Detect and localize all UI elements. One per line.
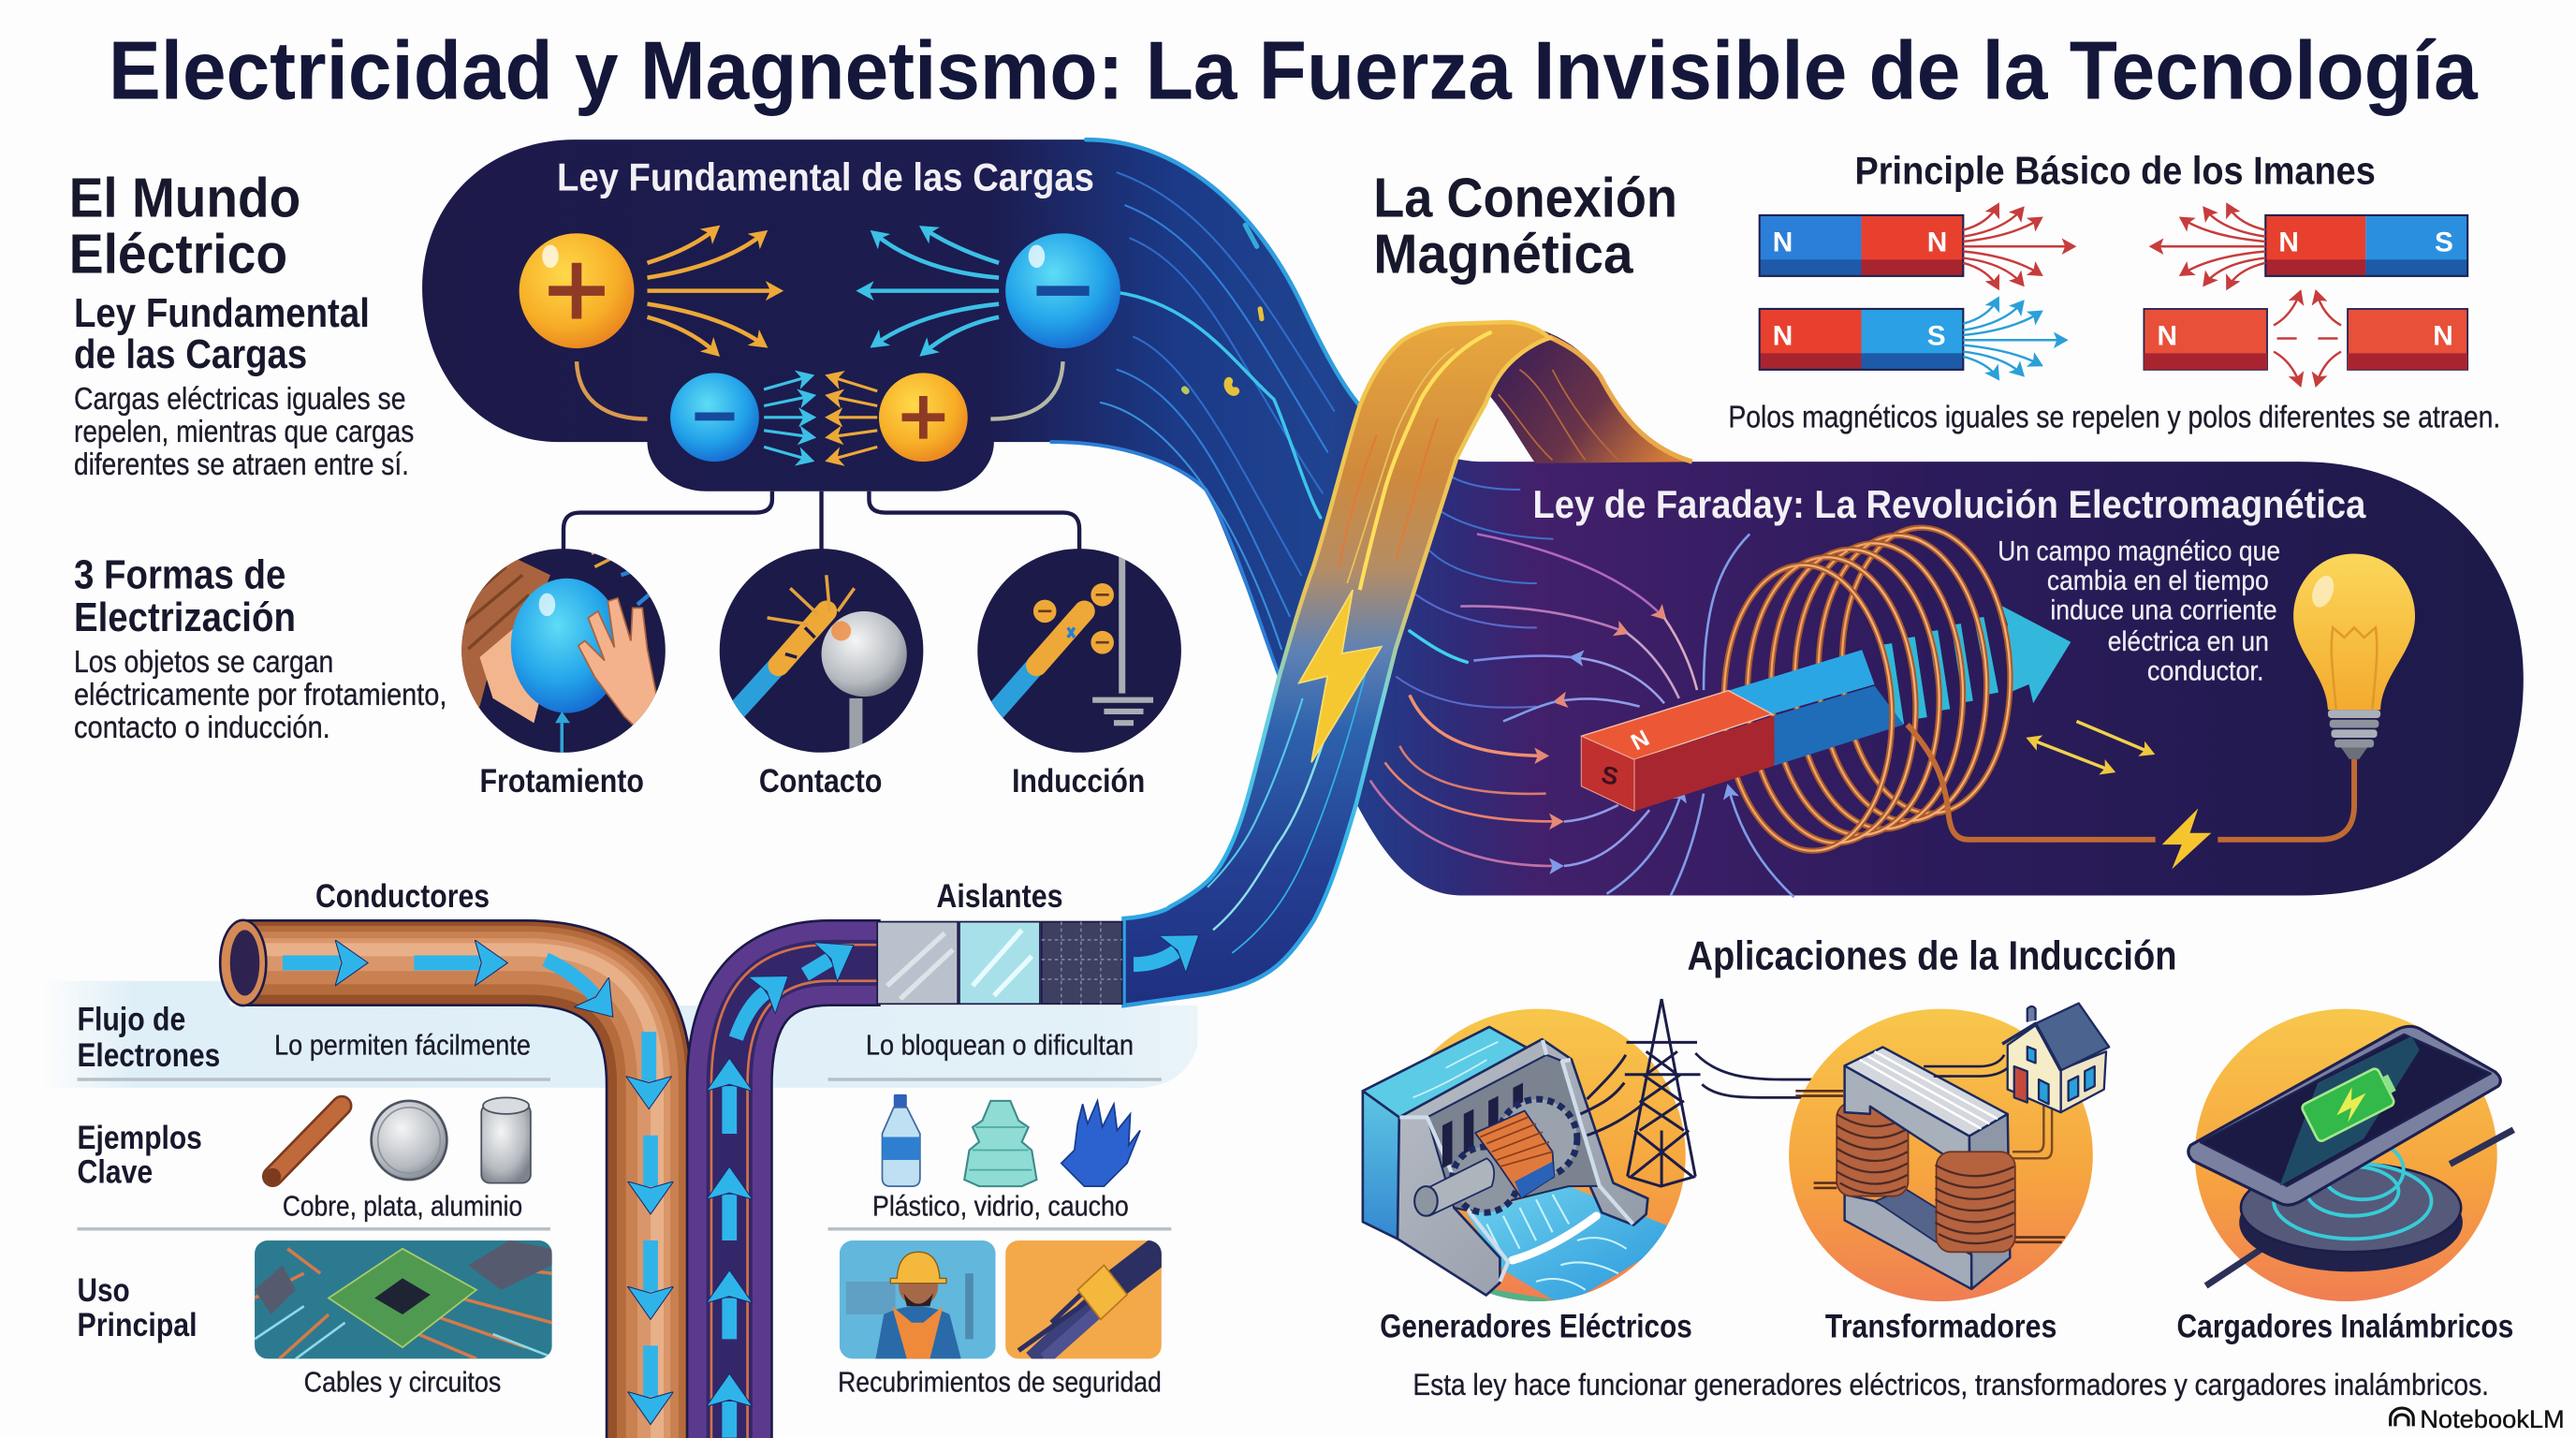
icon: electric generator (1363, 1009, 1686, 1306)
lamination side (1969, 1114, 2010, 1289)
magnet N S with blue field: N (1773, 321, 1793, 352)
charger pad (2206, 1130, 2513, 1285)
repulsion arrows negative (861, 228, 999, 353)
magnet pair repel S N: S (2435, 227, 2453, 258)
magnet N S with blue field: S (1927, 321, 1946, 352)
copper coil front half (1799, 523, 2019, 851)
magnet pair repel N N: N (1927, 227, 1947, 258)
bar magnet: N (1627, 726, 1654, 756)
application labels: Generadores Eléctricos (1380, 1309, 1692, 1345)
gold to blue ribbon (1123, 322, 1550, 1005)
copper coil back half (1715, 528, 1935, 855)
water tank (1363, 1027, 1528, 1117)
row: electron flow: Lo bloquean o dificultan (866, 1029, 1134, 1062)
magnet pair with facing N poles: N (2433, 321, 2453, 352)
row: electron flow (77, 1001, 1134, 1074)
icon: glass insulator (964, 1101, 1036, 1186)
comparison table headers (315, 878, 1063, 915)
heading: Principle Básico de los Imanes (1855, 149, 2376, 193)
applications heading: Aplicaciones de la Inducción (1687, 932, 2177, 978)
icon: large negative charge (1005, 233, 1120, 348)
icon: plastic bottle (882, 1094, 920, 1186)
attraction arrows (764, 376, 877, 460)
body text: diferentes se atraen entre sí. (74, 448, 409, 482)
bar magnet: S (1599, 760, 1621, 791)
right winding (1936, 1152, 2015, 1252)
bar magnet (1581, 606, 2071, 811)
ribbon back fold (1488, 322, 1692, 463)
row: key examples: Ejemplos (77, 1120, 202, 1156)
description text: cambia en el tiempo (2047, 565, 2269, 596)
magnet basics (1728, 149, 2500, 434)
text block: electric world (69, 167, 446, 745)
description text: induce una corriente (2050, 595, 2277, 626)
sub heading: de las Cargas (74, 331, 307, 377)
magnet pair repel N N (1760, 205, 2073, 287)
body text: contacto o inducción. (74, 711, 330, 745)
icon: transmission tower (1580, 999, 1843, 1186)
table row dividers (77, 1079, 1171, 1229)
icon: house (2002, 1004, 2109, 1112)
lower core (1845, 1195, 1971, 1289)
magnet pair repel S N: N (2278, 227, 2299, 258)
electrification labels: Inducción (1012, 763, 1145, 800)
electrification labels (479, 763, 1145, 800)
insulator electron arrows (729, 951, 1177, 1438)
icon: large positive charge (520, 233, 634, 348)
row: key examples: Plástico, vidrio, caucho (872, 1190, 1129, 1223)
sub heading: 3 Formas de (74, 551, 285, 597)
row: main use (77, 1240, 1162, 1399)
connector lines to electrification circles (564, 492, 1079, 552)
soft band behind electron flow row (41, 981, 1197, 1088)
ribbon light streaks (1051, 139, 1553, 708)
description text: conductor. (2147, 656, 2264, 687)
application labels: Cargadores Inalámbricos (2177, 1309, 2513, 1345)
icon: NotebookLM logo (2391, 1408, 2413, 1426)
comparison table headers: Aislantes (936, 878, 1063, 915)
row: electron flow: Flujo de (77, 1001, 185, 1037)
left winding (1837, 1103, 1909, 1196)
magnet pair repel S N (2152, 205, 2467, 287)
icon: small positive charge (879, 373, 968, 462)
electrification labels: Frotamiento (479, 763, 644, 800)
connectors between charge pairs (577, 361, 1063, 419)
sub heading: Electrización (74, 594, 296, 640)
right section heading: La Conexión (1373, 167, 1677, 229)
description text: Un campo magnético que (1998, 536, 2280, 566)
image: safety worker (840, 1240, 996, 1358)
application labels (1380, 1309, 2513, 1345)
image: cable insulation (1005, 1240, 1162, 1358)
row: key examples (77, 1094, 1140, 1223)
application labels: Transformadores (1825, 1309, 2056, 1345)
upper core (1845, 1065, 1969, 1170)
row: main use: Principal (77, 1307, 198, 1343)
purple insulator pipe (711, 945, 1177, 1438)
body text: eléctricamente por frotamiento, (74, 678, 446, 712)
sub heading: Ley Fundamental (74, 290, 370, 336)
icon: lightning on wire (2162, 808, 2211, 869)
icon: rubber glove (1061, 1101, 1140, 1186)
front gear (1453, 1147, 1518, 1212)
watermark: NotebookLM: NotebookLM (2420, 1404, 2565, 1433)
row: main use: Recubrimientos de seguridad (838, 1366, 1162, 1399)
magnet N S with blue field (1760, 299, 2065, 378)
magnet pair repel N N: N (1773, 227, 1793, 258)
icon: small negative charge (670, 373, 759, 462)
shaft (1421, 1158, 1494, 1216)
icon: transformer (1789, 1009, 2093, 1301)
magnet pair with facing N poles: N (2157, 321, 2177, 352)
icon: contact electrification (720, 549, 923, 764)
flowing dark panel: charges to Faraday (422, 139, 2524, 895)
panel: fundamental law of charges (520, 155, 1120, 462)
conductor electron arrows (283, 960, 651, 1397)
row: electron flow: Lo permiten fácilmente (274, 1029, 531, 1062)
comparison table headers: Conductores (315, 878, 490, 915)
section heading: El Mundo (69, 167, 300, 229)
row: main use: Cables y circuitos (304, 1366, 501, 1399)
back gear (1499, 1099, 1577, 1178)
copper drum (1475, 1110, 1554, 1197)
row: key examples: Clave (77, 1154, 153, 1191)
icon: lightning bolt on ribbon (1299, 590, 1382, 762)
phone screen (2201, 1034, 2491, 1186)
repulsion arrows positive (648, 228, 779, 353)
row: electron flow: Electrones (77, 1037, 220, 1074)
icon: wireless charger and phone (2188, 1009, 2513, 1301)
induced current arrows (2030, 721, 2150, 770)
icon: copper rod (265, 1106, 342, 1184)
magnet pair with facing N poles (2144, 292, 2467, 385)
body text: Cargas eléctricas iguales se (74, 382, 406, 417)
battery icon (2301, 1064, 2401, 1142)
panel heading: Ley de Faraday: La Revolución Electromagnética (1533, 482, 2366, 526)
copper conductor pipe (220, 920, 657, 1438)
body text: repelen, mientras que cargas (74, 415, 414, 449)
row: main use: Uso (77, 1272, 130, 1309)
body text: Los objetos se cargan (74, 645, 333, 680)
row: key examples: Cobre, plata, aluminio (283, 1190, 522, 1223)
icon: silver disc (372, 1101, 446, 1180)
icon: induction electrification (977, 549, 1181, 753)
image: circuit board (255, 1240, 552, 1358)
electrification labels: Contacto (759, 763, 882, 800)
icon: light bulb (2293, 553, 2415, 759)
panel: Faraday law (1370, 482, 2415, 897)
description text: eléctrica en un (2108, 626, 2269, 657)
panel heading: Ley Fundamental de las Cargas (557, 155, 1094, 199)
title: Electricidad y Magnetismo: La Fuerza Invisible de la Tecnología (109, 24, 2479, 116)
water channel (1467, 1186, 1667, 1306)
dam wall (1398, 1039, 1647, 1295)
magnetic field lines (1370, 534, 1794, 897)
right section heading: Magnética (1373, 222, 1633, 285)
icon: rubbing a balloon (457, 544, 674, 756)
coil wire to bulb (1908, 725, 2354, 840)
phone body (2188, 1026, 2500, 1205)
icon: aluminium can (481, 1097, 531, 1183)
insulator material blocks (877, 922, 1122, 1004)
section heading: Eléctrico (69, 222, 287, 285)
